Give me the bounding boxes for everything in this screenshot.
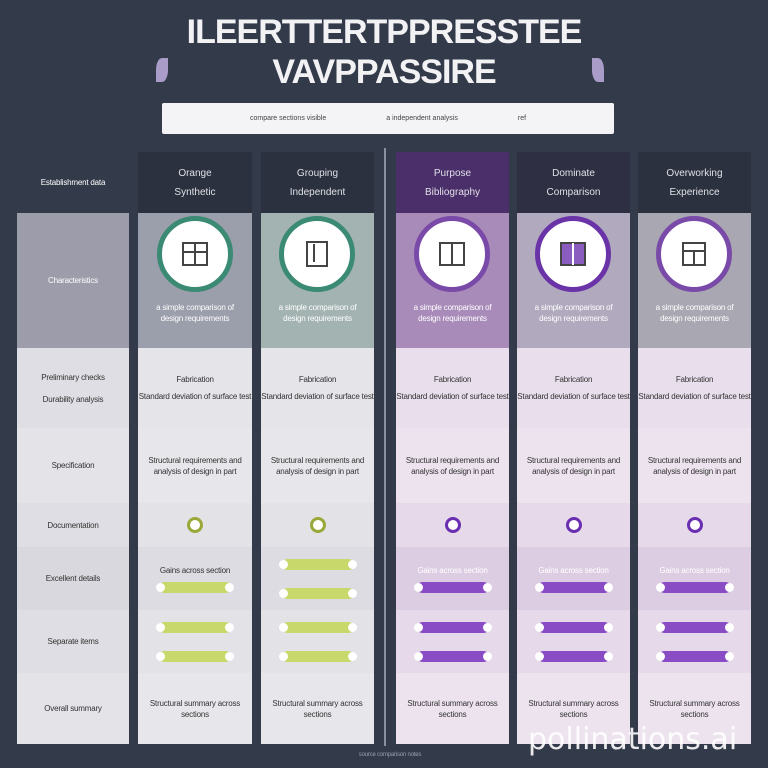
panel: label column: Preliminary checks [41,372,105,382]
panel: column 2 [261,152,374,744]
panel: column 2: Grouping [297,168,338,178]
panel: column 1: Standard deviation of surface test [139,392,251,401]
panel: column 1 [138,152,252,744]
panel: column 4: Structural summary across sections [528,698,619,718]
panel: column 4: a simple comparison of design requirements [535,303,612,323]
panel: column 4: Standard deviation of surface test [517,392,630,401]
panel: column 5: Standard deviation of surface test [638,392,751,401]
panel: column 3: Gains across section [417,566,488,574]
panel: column 4: Dominate [552,168,595,178]
panel: column 5: Structural summary across sections [649,698,740,718]
panel: column 2: a simple comparison of design requirements [279,303,356,323]
panel: column 5: Fabrication [676,375,713,384]
panel: column 1: Synthetic [174,186,216,198]
search bar [162,103,614,134]
panel: column 1: a simple comparison of design requirements [156,303,234,323]
panel: column 3: Structural requirements and analysis of design in part [406,456,499,476]
icon: book [157,216,233,292]
panel: label column: Durability analysis [43,394,103,404]
panel: label column: Specification [52,461,94,470]
panel: column 3: Bibliography [425,186,480,198]
panel: column 1: Orange [178,168,212,178]
watermark: pollinations.ai [528,722,737,757]
icon: left ornament [156,58,168,82]
title [187,13,581,91]
panel: column 5: a simple comparison of design requirements [656,303,733,323]
icon: book purple [414,216,490,292]
search bar: ref [518,115,526,122]
panel: column 1: Structural requirements and analysis of design in part [148,456,242,476]
panel: column 3: Purpose [434,168,471,178]
divider [384,148,386,746]
title: ILEERTTERTPPRESSTEE [187,13,581,51]
panel: column 4: Gains across section [538,566,609,574]
title: VAVPPASSIRE [272,53,496,91]
panel: column 2: Fabrication [299,375,336,384]
panel: column 1: Fabrication [176,375,214,384]
panel: column 5: Gains across section [659,566,730,574]
panel: column 5: Overworking [666,168,723,178]
panel: column 2: Structural summary across sections [272,698,363,718]
panel: column 3: Fabrication [434,375,471,384]
panel: label column: Excellent details [46,574,100,583]
search bar: compare sections visible [250,115,326,122]
icon: right ornament [592,58,604,82]
icon: window [656,216,732,292]
panel: column 3: Structural summary across sections [407,698,498,718]
panel: label column: Overall summary [44,704,102,713]
panel: label column: Establishment data [41,178,105,187]
panel: column 4: Comparison [547,186,600,198]
panel: label column: Separate items [47,637,98,646]
panel: label column [17,178,129,744]
panel: column 4: Structural requirements and analysis of design in part [527,456,620,476]
panel: column 5: Structural requirements and analysis of design in part [648,456,741,476]
panel: column 2: Structural requirements and analysis of design in part [271,456,364,476]
icon: door [279,216,355,292]
icon: book purple filled [535,216,611,292]
panel: column 1: Gains across section [160,566,230,574]
panel: column 4 [517,152,630,744]
panel: column 3: a simple comparison of design requirements [414,303,491,323]
panel: label column: Documentation [47,520,99,530]
panel: column 1: Structural summary across sections [150,698,240,718]
footer note: source comparison notes [359,752,421,758]
panel: column 2: Independent [290,186,345,198]
search bar: a independent analysis [386,115,458,122]
panel: label column: Characteristics [48,276,98,285]
panel: column 5 [638,152,751,744]
panel: column 5: Experience [669,186,720,198]
panel: column 4: Fabrication [555,375,592,384]
panel: column 3 [396,152,509,744]
panel: column 3: Standard deviation of surface test [396,392,509,401]
panel: column 2: Standard deviation of surface test [261,392,374,401]
